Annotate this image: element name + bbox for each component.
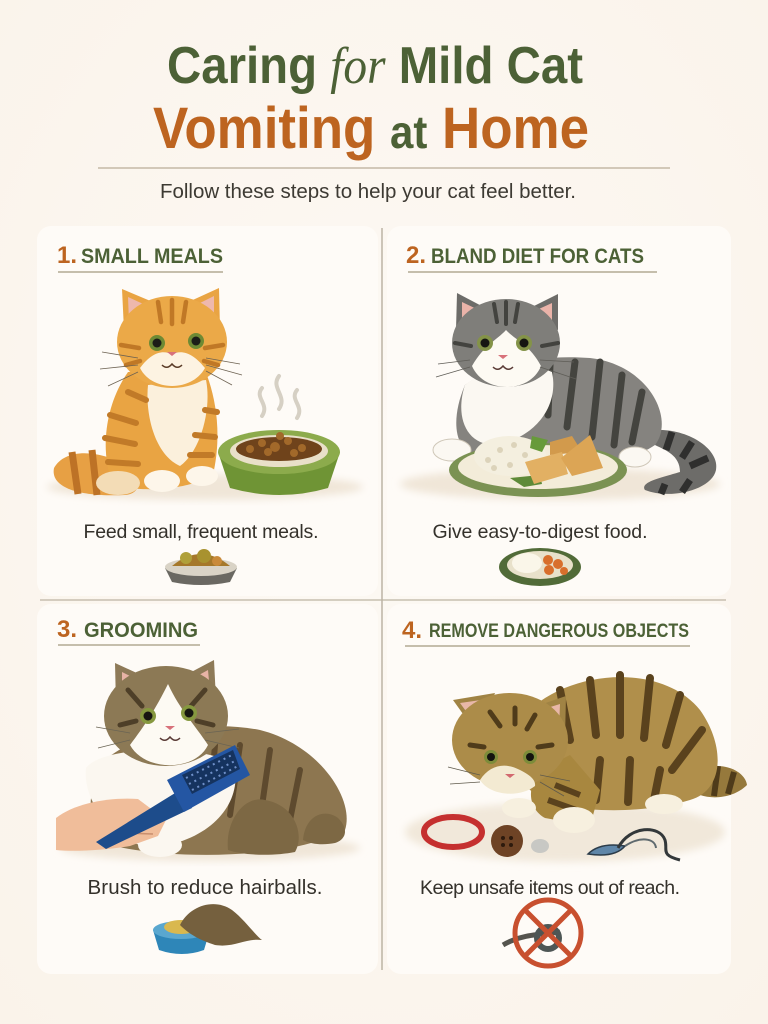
title: [153, 37, 589, 161]
panel: bland diet: [387, 226, 731, 596]
illustration: orange cat: [47, 288, 363, 500]
subtitle: Follow these steps to help your cat feel better.: [160, 180, 576, 203]
title: Caring for Mild Cat: [167, 37, 583, 95]
illustration: dangerous objects: [424, 817, 680, 860]
heading: grooming: GROOMING: [84, 619, 198, 642]
heading: bland diet: [406, 242, 657, 272]
heading: grooming: 3.: [57, 616, 77, 643]
illustration: plate of bland food: [449, 435, 627, 497]
heading: small meals: SMALL MEALS: [81, 245, 223, 268]
illustration: food bowl with steam: [218, 376, 340, 495]
heading: bland diet: 2.: [406, 242, 426, 269]
caption: bland diet: Give easy-to-digest food.: [432, 521, 648, 543]
illustration: fluffy cat: [60, 660, 360, 861]
icon: small bowl: [165, 549, 237, 585]
heading: dangerous objects: [402, 617, 690, 646]
panel: small meals: [37, 226, 378, 596]
heading: grooming: [57, 616, 200, 645]
heading: bland diet: BLAND DIET FOR CATS: [431, 245, 644, 268]
illustration: grey tabby cat: [400, 293, 720, 500]
icon: small plate: [499, 548, 581, 586]
panel: remove dangerous objects: [387, 604, 747, 974]
caption: grooming: Brush to reduce hairballs.: [88, 876, 322, 899]
heading: small meals: 1.: [57, 242, 77, 269]
icon: bowl with hair: [153, 904, 262, 954]
illustration: hand with brush: [56, 745, 250, 851]
heading: dangerous objects: 4.: [402, 617, 422, 644]
icon: prohibited items: [503, 900, 581, 966]
heading: small meals: [57, 242, 223, 272]
illustration: tabby cat crouching: [405, 675, 747, 862]
title: Vomiting at Home: [153, 96, 589, 161]
heading: dangerous objects: REMOVE DANGEROUS OBJECTS: [429, 621, 689, 642]
caption: dangerous objects: Keep unsafe items out of reach.: [420, 877, 680, 899]
caption: small meals: Feed small, frequent meals.: [84, 521, 318, 543]
panel: grooming: [37, 604, 378, 974]
